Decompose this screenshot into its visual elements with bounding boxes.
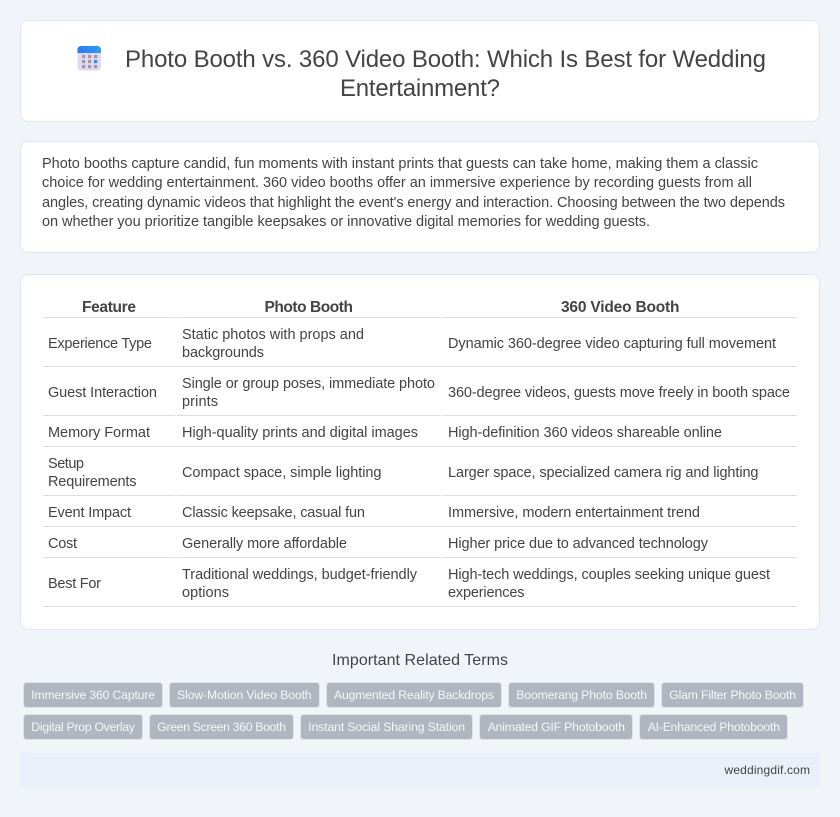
row: guest interaction: Guest Interaction bbox=[48, 385, 157, 401]
intro paragraph bbox=[42, 156, 785, 230]
row: cost: Cost bbox=[48, 536, 77, 552]
tag: Immersive 360 Capture bbox=[24, 682, 162, 708]
tag: Animated GIF Photobooth bbox=[480, 714, 632, 740]
tag: Slow-Motion Video Booth bbox=[170, 682, 320, 708]
tag: Instant Social Sharing Station: Instant Social Sharing Station bbox=[308, 720, 465, 734]
title: Entertainment? bbox=[340, 75, 500, 102]
row: setup requirements: Requirements bbox=[48, 474, 136, 490]
row: experience type: Experience Type bbox=[48, 336, 152, 352]
related terms heading: Important Related Terms bbox=[332, 652, 508, 669]
intro paragraph: choice for wedding entertainment. 360 video booths offer an immersive experience by recording guests from all bbox=[42, 175, 752, 191]
tag: Glam Filter Photo Booth bbox=[662, 682, 804, 708]
table header row: Photo Booth bbox=[264, 299, 353, 316]
tag: Glam Filter Photo Booth: Glam Filter Photo Booth bbox=[669, 688, 796, 702]
row: event impact: Event Impact bbox=[48, 505, 131, 521]
row: event impact bbox=[48, 505, 700, 521]
row: setup requirements: Compact space, simple lighting bbox=[182, 465, 382, 481]
row: event impact: Immersive, modern entertainment trend bbox=[448, 505, 700, 521]
row: best for: Best For bbox=[48, 576, 101, 592]
table header row bbox=[82, 299, 680, 316]
row: setup requirements: Larger space, specialized camera rig and lighting bbox=[448, 465, 758, 481]
intro text panel bbox=[20, 142, 820, 252]
tag: Digital Prop Overlay: Digital Prop Overlay bbox=[31, 720, 136, 734]
row: guest interaction: 360-degree videos, guests move freely in booth space bbox=[448, 385, 790, 401]
tag: AI-Enhanced Photobooth bbox=[640, 714, 788, 740]
tag: Slow-Motion Video Booth: Slow-Motion Video Booth bbox=[177, 688, 312, 702]
row: setup requirements bbox=[48, 456, 758, 490]
row: experience type: Dynamic 360-degree video capturing full movement bbox=[448, 336, 776, 352]
row: memory format bbox=[48, 425, 722, 441]
tag: Green Screen 360 Booth: Green Screen 360 Booth bbox=[157, 720, 286, 734]
tag: Boomerang Photo Booth: Boomerang Photo Booth bbox=[516, 688, 647, 702]
tag: Animated GIF Photobooth: Animated GIF Photobooth bbox=[488, 720, 625, 734]
title bbox=[125, 46, 766, 102]
row: best for: Traditional weddings, budget-friendly bbox=[182, 567, 418, 583]
related terms tags bbox=[24, 682, 804, 740]
footer bar bbox=[20, 753, 820, 787]
tag: Augmented Reality Backdrops bbox=[326, 682, 502, 708]
tag: AI-Enhanced Photobooth: AI-Enhanced Photobooth bbox=[648, 720, 780, 734]
tag: Boomerang Photo Booth bbox=[508, 682, 654, 708]
intro paragraph: angles, creating dynamic videos that highlight the event's energy and interaction. Choosing between the two depends bbox=[42, 195, 785, 211]
row: cost bbox=[48, 536, 709, 552]
row: cost: Generally more affordable bbox=[182, 536, 347, 552]
footer source text: weddingdif.com bbox=[724, 763, 810, 777]
comparison table panel bbox=[20, 274, 820, 630]
row: best for: High-tech weddings, couples seeking unique guest bbox=[448, 567, 770, 583]
tag: Instant Social Sharing Station bbox=[300, 714, 472, 740]
tag: Green Screen 360 Booth bbox=[150, 714, 294, 740]
icon: calendar bbox=[78, 46, 101, 70]
table header row: Feature bbox=[82, 299, 136, 316]
row: setup requirements: Setup bbox=[48, 456, 84, 472]
tag: Digital Prop Overlay bbox=[24, 714, 142, 740]
row: experience type: Static photos with props and bbox=[182, 327, 364, 343]
row: best for: experiences bbox=[448, 585, 524, 601]
row: memory format: High-definition 360 videos shareable online bbox=[448, 425, 722, 441]
row: guest interaction: Single or group poses, immediate photo bbox=[182, 376, 435, 392]
row: experience type bbox=[48, 327, 776, 361]
row: memory format: High-quality prints and digital images bbox=[182, 425, 418, 441]
row: memory format: Memory Format bbox=[48, 425, 150, 441]
row: best for bbox=[48, 567, 770, 601]
header panel bbox=[20, 20, 820, 122]
table header row: 360 Video Booth bbox=[561, 299, 680, 316]
row: guest interaction bbox=[48, 376, 790, 410]
intro paragraph: on whether you prioritize tangible keepsakes or innovative digital memories for wedding guests. bbox=[42, 214, 650, 230]
tag: Immersive 360 Capture: Immersive 360 Capture bbox=[31, 688, 155, 702]
tag: Augmented Reality Backdrops: Augmented Reality Backdrops bbox=[334, 688, 494, 702]
row: experience type: backgrounds bbox=[182, 345, 264, 361]
row: cost: Higher price due to advanced technology bbox=[448, 536, 709, 552]
title: Photo Booth vs. 360 Video Booth: Which Is Best for Wedding bbox=[125, 46, 766, 73]
row: event impact: Classic keepsake, casual fun bbox=[182, 505, 365, 521]
row: guest interaction: prints bbox=[182, 394, 218, 410]
intro paragraph: Photo booths capture candid, fun moments with instant prints that guests can take home, making them a classic bbox=[42, 156, 758, 172]
row: best for: options bbox=[182, 585, 229, 601]
